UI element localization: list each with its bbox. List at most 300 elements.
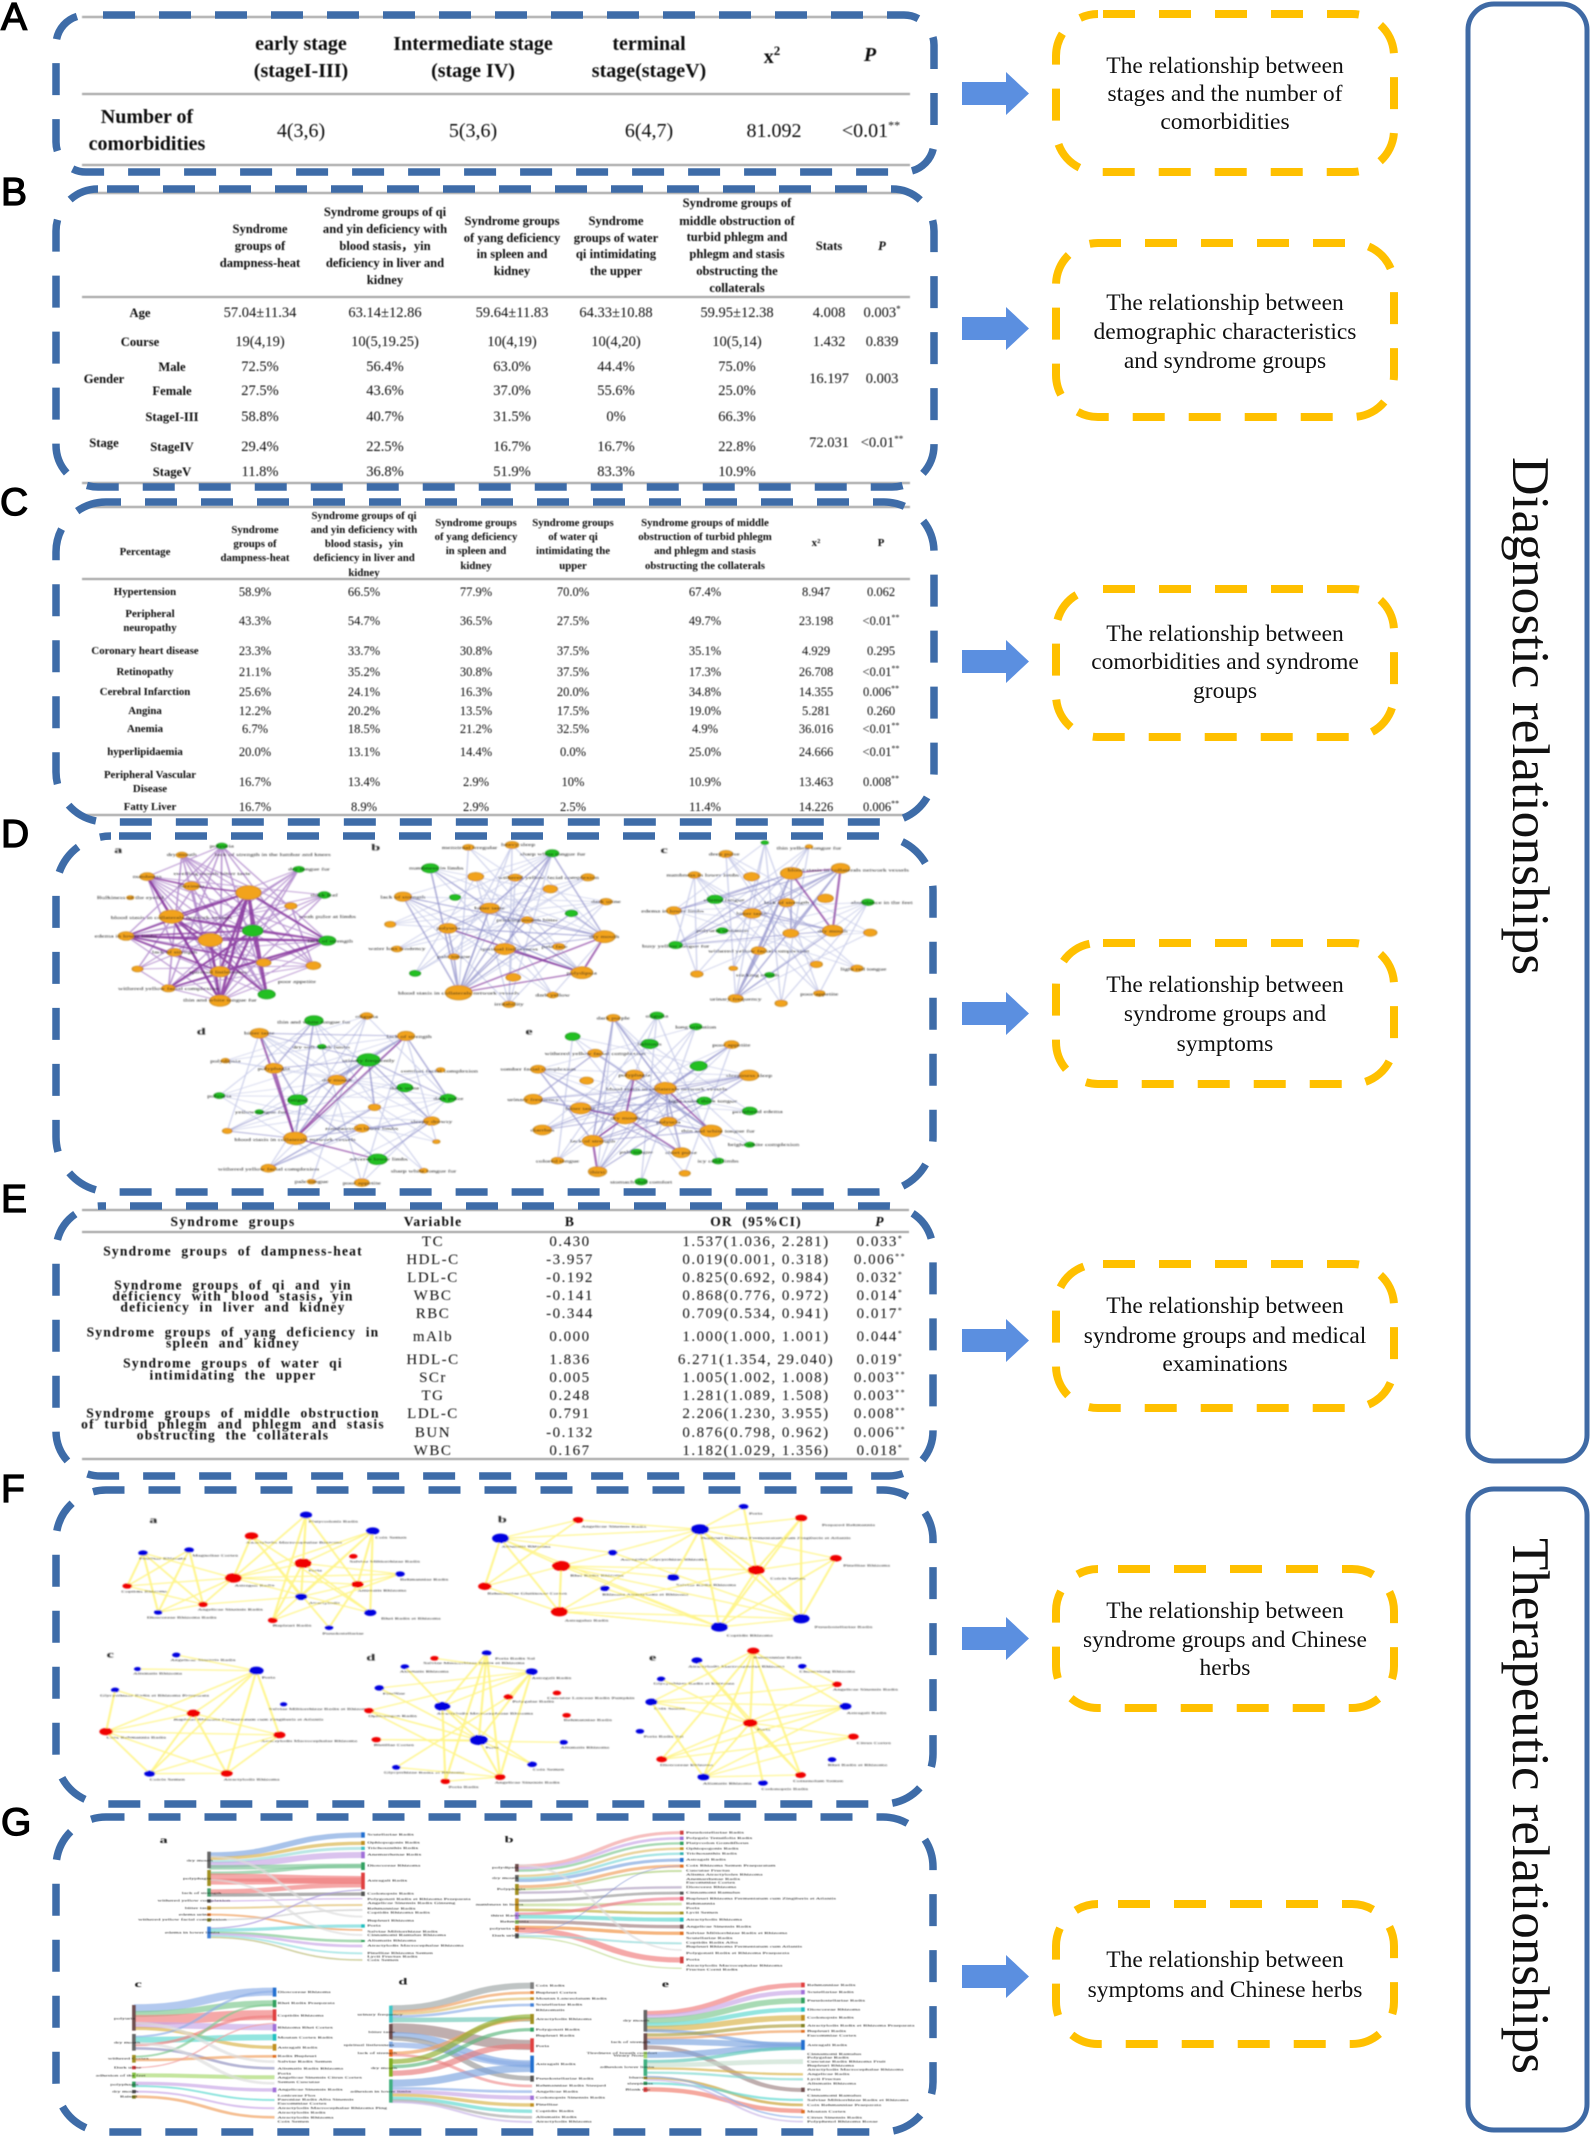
table E: spleen and kidney (166, 1336, 300, 1350)
table E: Syndrome groups of middle obstruction (86, 1406, 380, 1420)
herb network b: b (498, 1514, 507, 1524)
callout: syndrome groups and medical examinations: The relationship between (1106, 1293, 1344, 1319)
network a: weak pulse at limbs (298, 915, 357, 919)
herb network a: a (149, 1515, 158, 1525)
network c: c (661, 845, 668, 855)
sankey d: Codonopsis Sinensis Radix (536, 2096, 606, 2100)
sankey a: Rehmanniae Radix (367, 1907, 416, 1911)
table B: Syndrome groups (464, 214, 560, 228)
table C: x² (812, 537, 820, 549)
arrow B (962, 307, 1029, 350)
sankey a: Bupleuri Rhizoma (367, 1919, 415, 1923)
table E: 2.206(1.230, 3.955) (682, 1406, 830, 1422)
herb network c: Atractylodis Rhizoma (224, 1778, 280, 1782)
arrow A (962, 72, 1029, 115)
sankey e: blurred (629, 2076, 648, 2080)
herb network c: Poria (262, 1676, 276, 1680)
table C: Syndrome (231, 524, 279, 536)
sankey d: dry mouth (371, 2066, 398, 2070)
panel E dashed border (56, 1206, 933, 1476)
sankey e: Poria (807, 2088, 821, 2092)
network c: poor appetite (800, 993, 839, 997)
sankey e: adhesion lower limbs (600, 2065, 654, 2069)
table B: StageV (153, 465, 191, 479)
table E: 0.032 (857, 1270, 903, 1286)
herb network b: Bupleuri Rhizoma Fermentatum cum Zingiberis et Atlantis (701, 1536, 851, 1540)
table E: Syndrome groups of dampness-heat (103, 1244, 363, 1258)
panel letters A to G: C (0, 481, 28, 524)
herb network e: Citrus Cortex (857, 1741, 892, 1745)
sankey a: Coptidis Rhizoma Radix (367, 1911, 431, 1915)
table B: 0.839 (866, 334, 898, 350)
network e: oliguria (646, 1015, 669, 1019)
table C: Fatty Liver (124, 801, 176, 813)
sankey c: Poria (278, 2072, 292, 2076)
table E: deficiency in liver and kidney (120, 1300, 346, 1314)
network b: numbness in limbs (409, 867, 464, 871)
table E: OR (95%CI) (710, 1214, 802, 1228)
table E: * (898, 1288, 903, 1296)
sankey e: Coix Rehmanniae Praeparata (807, 2103, 882, 2107)
sankey a: Scutellariae Radix (367, 1833, 415, 1837)
network b: polydipsia (567, 972, 597, 976)
sankey d node bars (389, 1982, 534, 2107)
table E: TC (422, 1234, 444, 1250)
table B: 22.8% (718, 439, 756, 455)
sankey e: Bupleuri Rhizoma (807, 2064, 855, 2068)
table C: 58.9% (239, 585, 271, 599)
table C: 18.5% (348, 722, 380, 736)
panel A dashed border (56, 15, 934, 172)
side frame: Therapeutic relationships: Therapeutic relationships (1501, 1538, 1559, 2074)
herb network b: Pinelliae Rhizoma (843, 1564, 891, 1568)
table E: 0.000 (549, 1329, 591, 1345)
table B: Age (130, 306, 151, 320)
sankey d: Pinelliae (536, 2103, 559, 2107)
table B: 64.33±10.88 (579, 305, 653, 321)
table C: and phlegm and stasis (654, 545, 756, 557)
network graphs a to e (95, 841, 913, 1187)
table E: mAlb (413, 1329, 453, 1345)
herb networks a to e (99, 1504, 899, 1791)
table B: * (896, 304, 901, 314)
sankey b: polyuria urine (490, 1927, 526, 1931)
sankey c: dry mouth (112, 2090, 139, 2094)
table A: 6(4,7) (625, 120, 673, 142)
panel F: syndrome groups and Chinese herbs networks (56, 1490, 933, 1804)
network e: stomach dull comfort (610, 1180, 673, 1185)
table C: 0.006 (863, 684, 899, 699)
network b: water loss tendency (368, 947, 426, 951)
sankey b: Eucommiae Cortex (686, 1881, 736, 1885)
table B: phlegm and stasis (689, 247, 785, 261)
sankey d: adhesion in lower limbs (350, 2090, 411, 2094)
table E: 6.271(1.354, 29.040) (678, 1352, 834, 1368)
sankey a: Atractylodis Macrocephalae Rhizoma (367, 1944, 464, 1948)
table B: Syndrome groups of qi (324, 205, 447, 219)
callout: demographics and syndrome groups: The relationship between (1106, 290, 1344, 316)
network e: polyphagia (618, 1074, 651, 1078)
table B: blood stasis，yin (339, 239, 431, 253)
herb network b: Rhizoma Atractylodis et Rhizoma (602, 1593, 689, 1597)
sankey c: Eucommiae Cortex (278, 2102, 327, 2106)
network d: sleepy drowsy (411, 1120, 452, 1124)
sankey c: Atractylodis Rhizoma (278, 2116, 334, 2120)
herb network a: Coix Semen (375, 1536, 407, 1540)
table A: 2 (774, 42, 780, 58)
sankey b: Atractylodis Rhizoma (686, 1918, 743, 1922)
network a (95, 843, 357, 1006)
network a: dry mouth (167, 853, 197, 857)
network c: busy yellow tongue fur (642, 944, 709, 949)
herb network b: Pseudostellariae Radix (815, 1625, 873, 1629)
network d: dry soft weak limbs (292, 1045, 351, 1050)
network e (500, 1012, 799, 1185)
sankey e: Polygalae Radix (807, 2056, 850, 2060)
table E: -0.141 (546, 1288, 594, 1304)
table C: Coronary heart disease (91, 645, 199, 657)
herb network d: Rehmanniae Radix (564, 1718, 613, 1722)
table C: 17.5% (557, 704, 589, 718)
sankey c: Rhei Radix Praeparata (278, 2001, 336, 2005)
table B: deficiency in liver and (326, 256, 444, 270)
callout: syndrome groups and Chinese herbs: herbs (1200, 1655, 1250, 1681)
network c: edema in lower limbs (641, 910, 705, 914)
network c: blood stasis in collaterals network vessels (788, 869, 910, 873)
side frame: Diagnostic relationships (1468, 4, 1587, 1461)
table B: 31.5% (493, 409, 531, 425)
herb network c: Atractylodis Macrocephalae Rhizoma (261, 1739, 358, 1743)
sankey c: Alismatis Radix Rhizoma (278, 2067, 344, 2071)
sankey b: thirst Radix (491, 1914, 521, 1918)
callout: comorbidities and syndrome groups: comorbidities and syndrome (1091, 649, 1359, 675)
herb network d: Cuscutae Lanceae Radix Pumpkin (547, 1696, 635, 1700)
table E: ** (895, 1424, 906, 1434)
herb network e: Atractylodis Macrocephalae Rhizoma (688, 1665, 785, 1669)
sankey e (587, 1979, 915, 2124)
sankey c: Semen Cuscutae (278, 2080, 321, 2084)
table B: groups of (235, 239, 286, 253)
table C: 2.5% (560, 800, 586, 814)
table B: 16.7% (493, 439, 531, 455)
table B: 59.95±12.38 (700, 305, 774, 321)
sankey d: urinary frequency (358, 2012, 403, 2017)
sankey a: Poria (367, 1924, 382, 1928)
herb network e: Codonopsis Radix (761, 1787, 809, 1791)
sankey b: Angelicae Sinensis Radix (686, 1925, 752, 1929)
table E: 0.018 (857, 1442, 903, 1459)
table C: 20.0% (239, 745, 271, 759)
table C: Disease (133, 783, 167, 795)
table C: 16.3% (460, 685, 492, 699)
table C: 14.226 (799, 800, 833, 814)
network e: bright white complexion (728, 1143, 799, 1147)
network d: fatigue (287, 1098, 308, 1103)
network b: withered yellow facial complexion (498, 876, 599, 880)
table B: 51.9% (493, 464, 531, 480)
table A: x (764, 46, 774, 68)
table E: * (898, 1270, 903, 1278)
network b: menstrual irregular (442, 846, 497, 850)
table B: StageIV (150, 440, 194, 454)
table B: 10(4,20) (591, 334, 641, 350)
table B: 19(4,19) (235, 334, 285, 350)
table C: ** (891, 774, 899, 782)
table E: 0.044 (857, 1328, 903, 1345)
callout: syndrome groups and symptoms: symptoms (1177, 1031, 1273, 1057)
panel letters A to G: B (1, 171, 27, 214)
table B: 58.8% (241, 409, 279, 425)
panel D: syndrome groups and symptoms networks (56, 836, 933, 1192)
herb network b: Astragalus Glycyrrhizae Rhizoma (620, 1558, 708, 1562)
table B: P (878, 239, 886, 253)
table E: of turbid phlegm and phlegm and stasis (81, 1416, 385, 1432)
network c: abundance in the feet (851, 901, 913, 905)
herb network a: Bupleuri Radix (273, 1624, 312, 1628)
sankey d: Coptidis Radix (536, 2109, 575, 2113)
table C: <0.01 (863, 612, 899, 628)
table E: 0.014 (857, 1288, 903, 1304)
table E: 1.836 (549, 1352, 591, 1368)
herb network a: Rhei Radix et Rhizoma (381, 1617, 441, 1621)
sankey a: Angelicae Sinensis Radix Ginseng (367, 1901, 456, 1905)
callout: stages and comorbidities: stages and the number of (1108, 81, 1343, 107)
sankey c: polyphagia (110, 2083, 139, 2087)
network e: polyuria (656, 1121, 681, 1125)
table C: 0.295 (867, 644, 895, 658)
arrow C (962, 640, 1029, 683)
sankey b: Poria (686, 1958, 700, 1962)
sankey c: Astragali Radix (278, 2046, 318, 2050)
network d: withered yellow facial complexion (218, 1167, 319, 1172)
sankey c: Dark urine (114, 2066, 142, 2070)
table C: ** (891, 664, 899, 672)
herb network e: Coixenolum Semen (793, 1779, 844, 1783)
herb network e: e (649, 1653, 656, 1663)
herb network e (636, 1648, 899, 1791)
herb network c: Bupleuri Rhizoma Fermentatum cum Zingiberis et Atlantis (173, 1718, 323, 1722)
table B: 37.0% (493, 383, 531, 399)
table A: 81.092 (746, 120, 802, 142)
network d: thin and white tongue fur (277, 1020, 351, 1025)
network c: numbness in lower limbs (667, 874, 740, 878)
network b: pale face (541, 945, 568, 949)
sankey e: Bupleuri Radix (807, 2029, 847, 2033)
table E: 0.006 (854, 1252, 906, 1268)
table B: Male (158, 360, 186, 374)
table E: obstructing the collaterals (137, 1428, 329, 1442)
table B: the upper (590, 264, 642, 278)
network e: somber facial complexion (500, 1067, 576, 1072)
network b: dry mouth (589, 935, 619, 939)
callout: stages and comorbidities (1056, 14, 1394, 172)
table E: 0.008 (854, 1406, 906, 1422)
sankey e: Angelicae Radix (807, 2072, 850, 2076)
table C: 0.008 (863, 774, 899, 789)
sankey a: Coix Semen (367, 1958, 399, 1962)
network e: halitosis (638, 1043, 663, 1047)
table E: Variable (404, 1214, 462, 1228)
table C: groups of (233, 538, 277, 550)
table E: P (875, 1214, 885, 1228)
sankey b: Alisma Atractylodes Rhizoma (686, 1873, 763, 1877)
network b: irritability (494, 1003, 524, 1007)
table E: 0.003 (854, 1370, 906, 1386)
network d: oliguria (355, 1015, 378, 1019)
network d: lack of strength (386, 1035, 432, 1039)
table C: Hypertension (114, 586, 176, 598)
table C: 8.9% (351, 800, 377, 814)
network e: e (525, 1027, 533, 1037)
sankey e: Cinnamomi Ramulus (807, 2052, 861, 2056)
sankey diagrams a to e (96, 1831, 915, 2124)
table E: BUN (415, 1425, 451, 1441)
sankey c: Rhizoma Rhei Cortex (278, 2026, 333, 2030)
sankey b: Dark urine (492, 1934, 520, 1938)
table B: 63.0% (493, 359, 531, 375)
table E: deficiency with blood stasis，yin (112, 1288, 354, 1304)
sankey e: Eucommiae Cortex (807, 2034, 857, 2038)
table A: stage(stageV) (592, 60, 706, 82)
table E: B (565, 1214, 575, 1228)
sankey d: Bupleuri Cortex (536, 1991, 577, 1995)
network d: blood stasis in collaterals network vessels (235, 1138, 357, 1142)
callout: syndrome groups and symptoms: syndrome groups and (1124, 1001, 1326, 1027)
sankey d: Pseudostellariae Radix (536, 2077, 594, 2081)
table A: Intermediate stage (393, 33, 553, 55)
sankey c: withered Cortex (108, 2057, 150, 2061)
sankey b: Cuscutae Fructus (686, 1869, 730, 1873)
herb network c: Glycyrrhizae Radix et Rhizoma Praeparata (100, 1694, 210, 1698)
panel G: symptoms and Chinese herbs sankey diagrams (56, 1817, 933, 2132)
sankey b: Scutellariae Radix (686, 1936, 733, 1940)
herb network e: Chuanxiong Rhizoma (799, 1670, 856, 1674)
sankey a: Dioscoreae Rhizoma (367, 1864, 421, 1868)
table C: Anemia (127, 723, 164, 735)
sankey e: Codonopsis Radix (807, 2016, 854, 2020)
herb network d: Salviae Miltiorrhizae Radix et Rhizoma (423, 1661, 525, 1665)
table C: hyperlipidaemia (107, 746, 183, 758)
sankey d: Atractylodis Rhizoma (536, 2120, 593, 2124)
arrow D (962, 992, 1029, 1035)
table B: middle obstruction of (679, 214, 796, 228)
callout: syndrome groups and medical examinations: examinations (1162, 1351, 1288, 1377)
network e: sleepiness sleep (726, 1074, 772, 1078)
network b: b (371, 842, 380, 852)
network a: numbness (133, 875, 163, 879)
table C: 25.0% (689, 745, 721, 759)
callout: symptoms and Chinese herbs (1056, 1904, 1394, 2044)
network d: d (197, 1027, 207, 1037)
table C: 54.7% (348, 614, 380, 628)
network e: icy cold limbs (698, 1160, 740, 1164)
table B: 44.4% (597, 359, 635, 375)
table A: Number of (101, 106, 194, 128)
callout: symptoms and Chinese herbs: symptoms and Chinese herbs (1088, 1977, 1362, 2003)
panel letters A to G: G (1, 1801, 31, 1844)
table C: Syndrome groups (532, 517, 614, 529)
table C: Cerebral Infarction (100, 686, 190, 698)
callout: symptoms and Chinese herbs: The relationship between (1106, 1947, 1344, 1973)
sankey e: Blank top (625, 2088, 651, 2092)
herb network b: Rhei Radix Rhizoma (570, 1574, 624, 1578)
network e: dark purple (597, 1017, 630, 1021)
table C: 25.6% (239, 685, 271, 699)
table B: 1.432 (813, 334, 845, 350)
herb network b: Rehmanniae Glutinosae Cortex (487, 1592, 568, 1596)
table B: 56.4% (366, 359, 404, 375)
network a: lack of strength (152, 950, 197, 955)
sankey b: Polygala Tenuifolia Radix (686, 1836, 753, 1840)
network e: colored tongue (536, 1160, 580, 1164)
sankey e: Atractylodis Radix et Rhizoma Praeparata (807, 2024, 915, 2028)
sankey e: Lycii Fructus (807, 2077, 841, 2081)
herb network c: Coix Rehmannia Radix (107, 1736, 167, 1740)
network b: sharp white tongue fur (520, 852, 585, 857)
network d: polyphagia (258, 1067, 291, 1071)
sankey b: Bupleuri Rhizoma Fermentatum cum Zingiberis et Atlantis (686, 1897, 836, 1901)
table C: 77.9% (460, 585, 492, 599)
table C: 37.5% (557, 644, 589, 658)
table B: 0.003 (866, 371, 898, 387)
table C: 10.9% (689, 775, 721, 789)
herb network a: Atractylodis Macrocephalae Rhizoma (246, 1541, 343, 1545)
table E: * (898, 1328, 903, 1338)
network d: dark urine (390, 1087, 420, 1091)
network a: thin and white tongue fur (183, 998, 257, 1003)
table C: 8.947 (802, 585, 830, 599)
sankey d: Bupleuri Radix (536, 2034, 575, 2038)
table C: 13.4% (348, 775, 380, 789)
network a: Bulkiness of the eyelid (97, 896, 164, 900)
table E: 0.248 (549, 1388, 591, 1404)
herb network b: Coptidis Rhizoma (727, 1634, 774, 1638)
sankey b: Rehmannia (686, 1902, 716, 1906)
table C: 66.5% (348, 585, 380, 599)
table C: 35.1% (689, 644, 721, 658)
network d: dry mouth (322, 1079, 352, 1083)
callout: syndrome groups and Chinese herbs: The relationship between (1106, 1598, 1344, 1624)
network e: urinary frequency (507, 1098, 559, 1102)
herb network b: Astragalus Radix (565, 1619, 609, 1623)
table A (82, 17, 910, 165)
sankey a: Pinelliae Rhizoma Semen (367, 1951, 433, 1955)
sankey b: Polyphagia (497, 1887, 526, 1891)
sankey d: spiritual listlessness (344, 2043, 394, 2047)
network b: spiritual listlessness (480, 948, 539, 952)
table A: 4(3,6) (277, 120, 325, 142)
table A: comorbidities (89, 133, 206, 155)
table A: 5(3,6) (449, 120, 497, 142)
table C: 43.3% (239, 614, 271, 628)
table A: (stage IV) (431, 60, 515, 82)
table C: 6.7% (242, 722, 268, 736)
sankey d: Rhizomatis (536, 2008, 565, 2012)
table B: ** (894, 434, 904, 444)
network e: diarrhea (530, 1129, 555, 1133)
table C: Peripheral (125, 608, 175, 620)
table C: obstruction of turbid phlegm (638, 531, 772, 543)
table C: 23.3% (239, 644, 271, 658)
table E: 0.019(0.001, 0.318) (682, 1252, 830, 1268)
network a: dry tongue fur (288, 867, 330, 872)
sankey b: dry mouth (492, 1876, 519, 1880)
table E: TG (422, 1388, 444, 1404)
table C: Retinopathy (116, 666, 174, 678)
sankey a: polyphagia (183, 1877, 212, 1881)
table A: <0.01 (842, 120, 888, 142)
network a: edema in lower limbs (95, 935, 158, 939)
